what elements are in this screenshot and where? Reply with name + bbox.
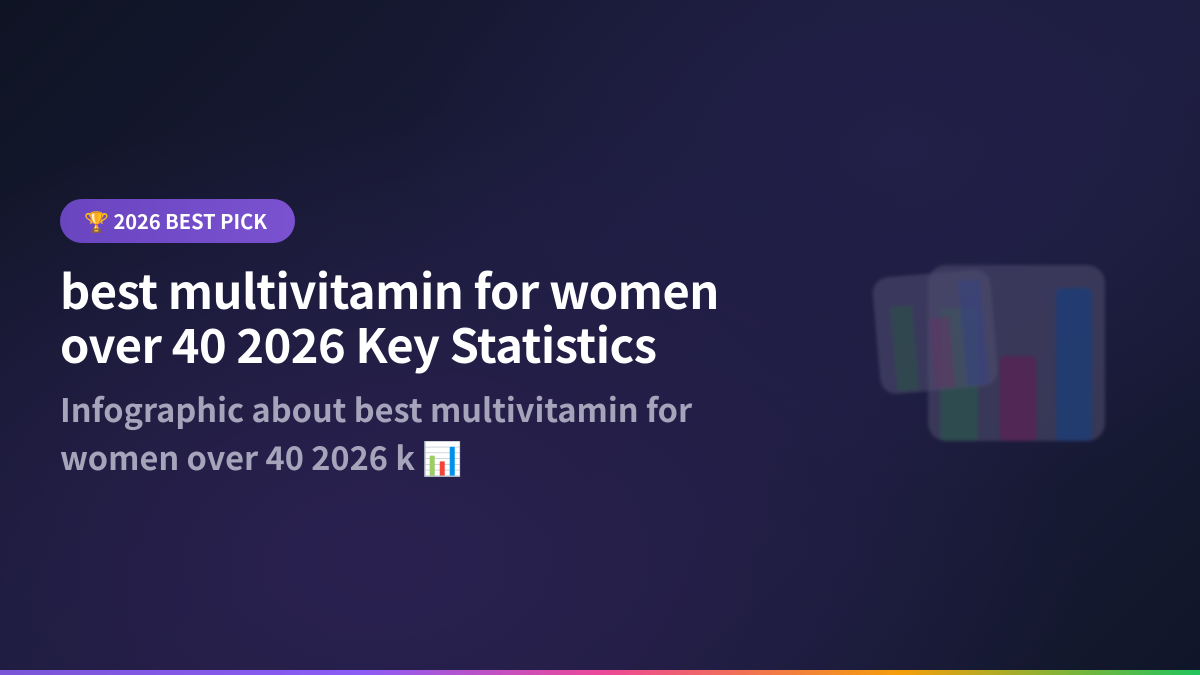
icon: blurred bar chart — [872, 264, 1106, 442]
rainbow bottom bar — [0, 670, 1200, 675]
badge — [60, 199, 295, 243]
badge: 🏆 2026 BEST PICK — [84, 206, 267, 235]
subtitle: Infographic about best multivitamin for women over 40 2026 k 📊 — [60, 385, 692, 480]
title: best multivitamin for women over 40 2026 Key Statistics — [60, 254, 719, 377]
